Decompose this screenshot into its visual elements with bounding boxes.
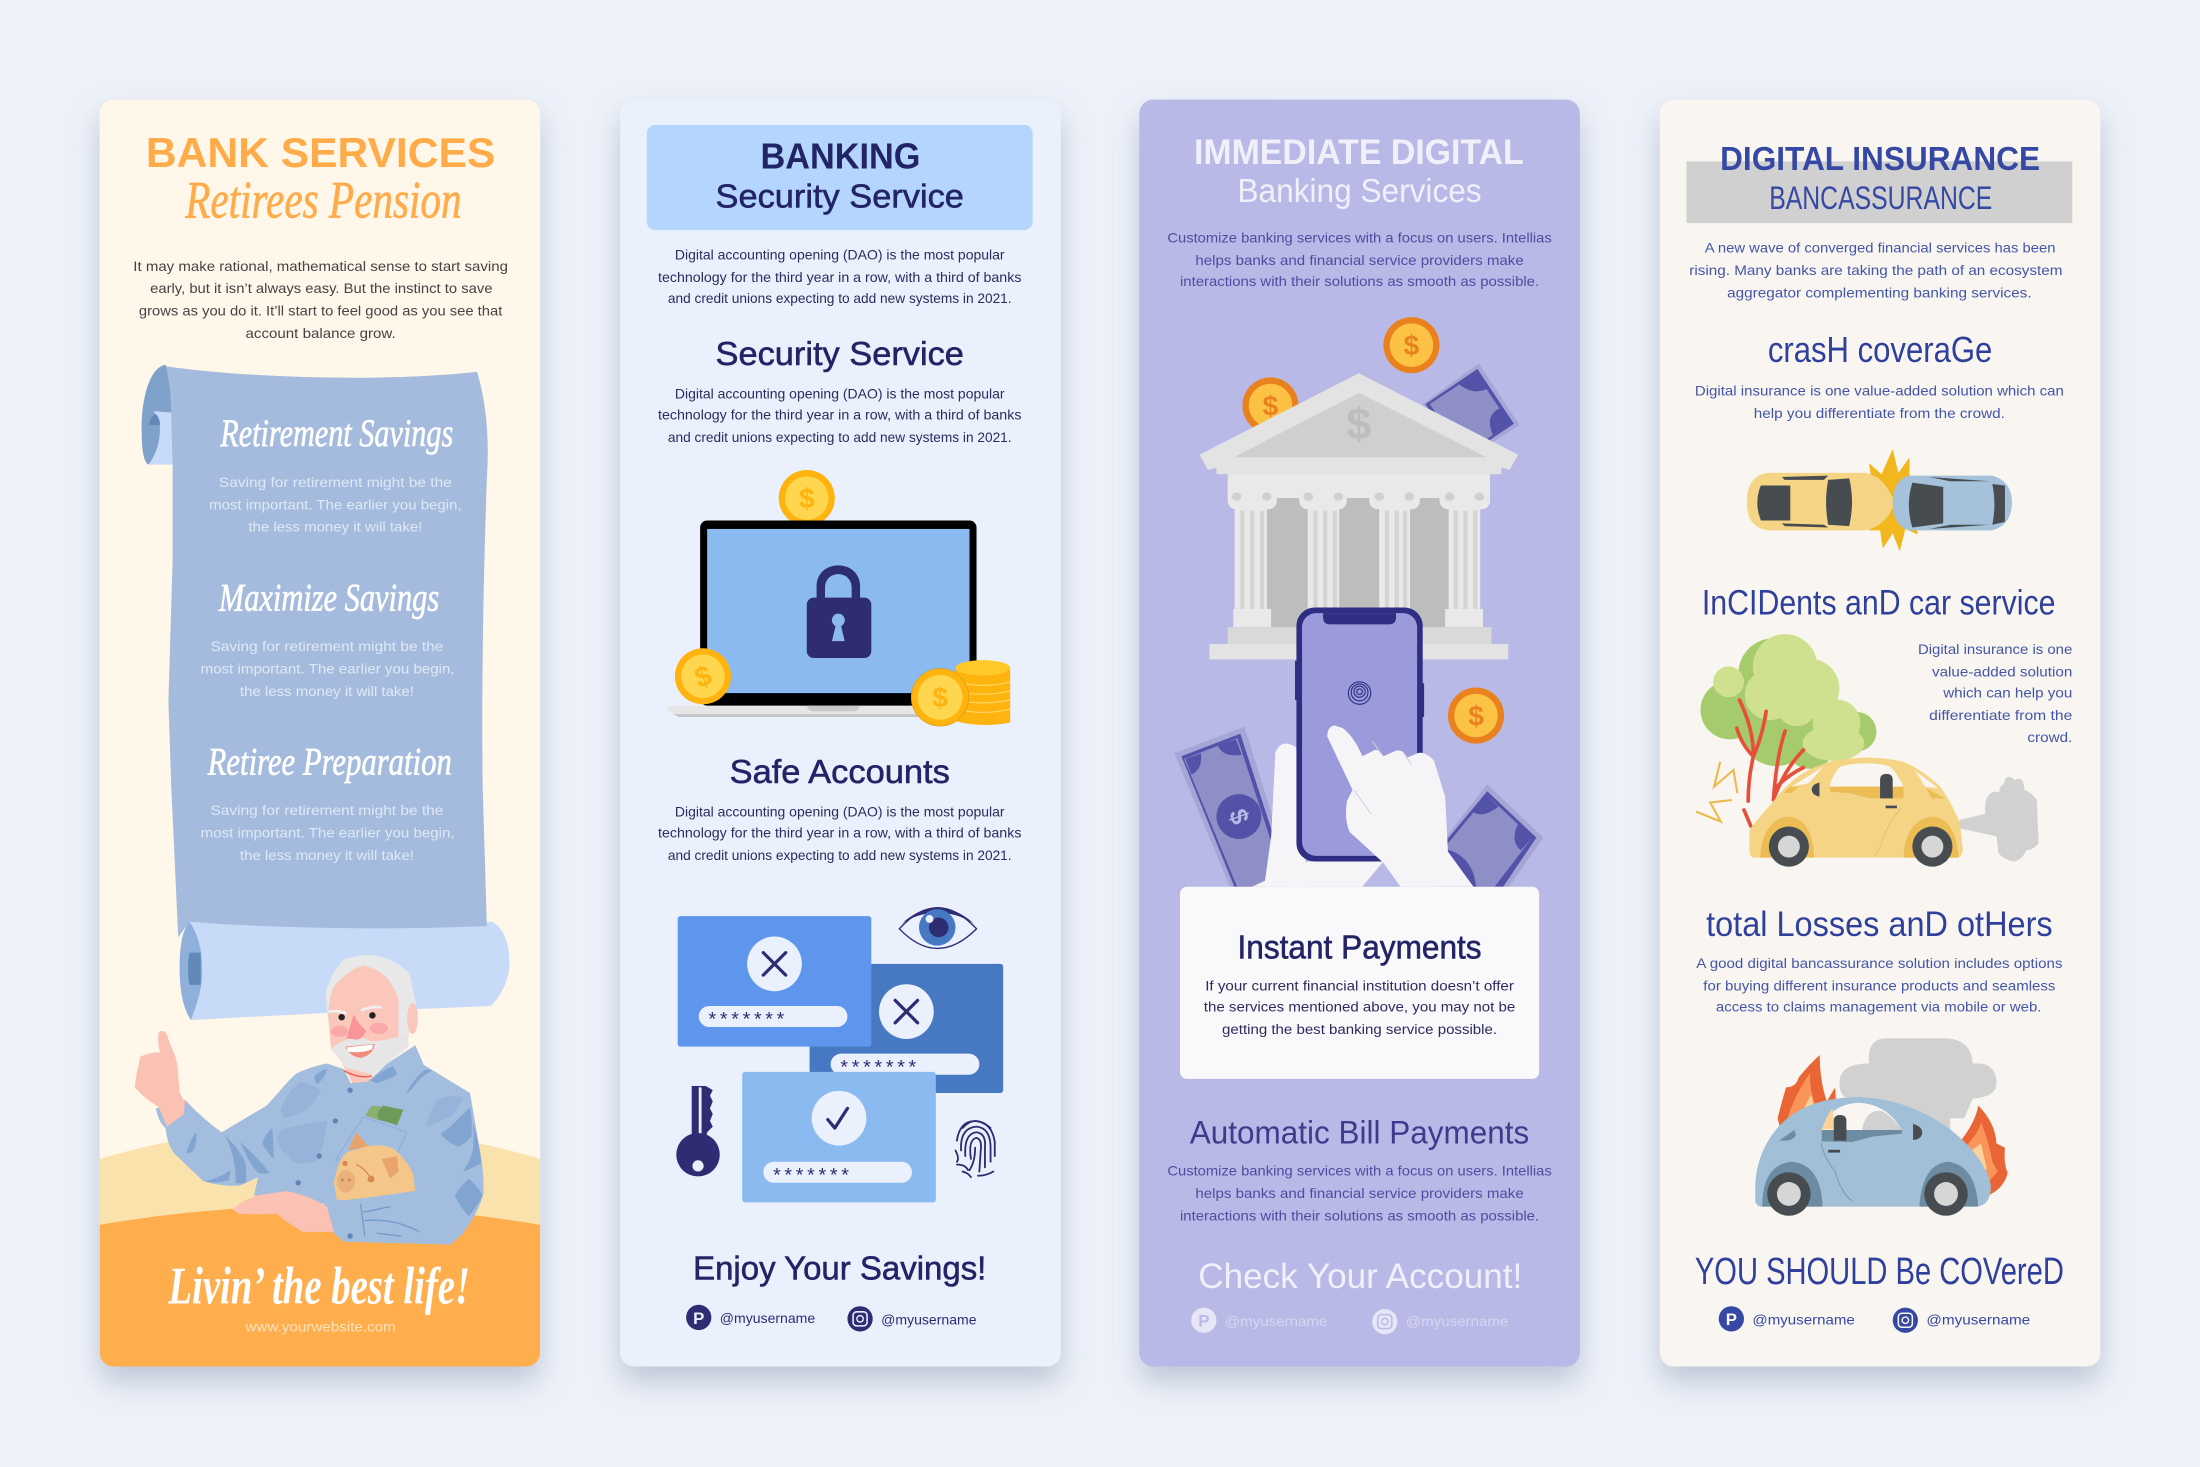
coins: $ <box>1263 390 1279 421</box>
flames <box>1778 1055 1838 1136</box>
header band <box>1686 161 2072 223</box>
social: pinterest: P <box>1198 1312 1209 1331</box>
title: BANK SERVICES <box>146 129 495 176</box>
paragraph: interactions with their solutions as smooth as possible. <box>1180 1208 1539 1224</box>
scroll <box>142 365 509 1020</box>
section: retiree preparation: Retiree Preparation <box>207 740 452 783</box>
resting hand <box>233 1191 334 1232</box>
title: DIGITAL INSURANCE <box>1720 141 2040 178</box>
icon: key <box>676 1086 720 1176</box>
panel: banking security service <box>620 100 1061 1367</box>
paragraph: access to claims management via mobile or web. <box>1716 999 2041 1015</box>
social: instagram <box>1893 1308 2030 1333</box>
banknote: bottom right <box>1444 784 1544 887</box>
card: failed login front <box>678 916 871 1047</box>
right aligned paragraph: differentiate from the <box>1929 707 2073 723</box>
section: retirement savings: Retirement Savings <box>220 412 453 455</box>
intro paragraph: early, but it isn’t always easy. But the instinct to save <box>150 280 493 296</box>
card: successful login <box>742 1072 936 1202</box>
section: retiree preparation <box>201 740 455 863</box>
paragraph: A good digital bancassurance solution includes options <box>1696 955 2062 971</box>
right aligned paragraph: crowd. <box>2027 729 2072 745</box>
shirt dark folds <box>187 1066 481 1183</box>
card background <box>100 100 540 1367</box>
paragraph: interactions with their solutions as smooth as possible. <box>1180 273 1539 289</box>
heading: safe accounts: Safe Accounts <box>730 754 950 791</box>
paragraph: and credit unions expecting to add new systems in 2021. <box>668 847 1012 863</box>
section: retirement savings: most important. The earlier you begin, <box>209 496 462 512</box>
subtitle: Security Service <box>716 179 964 216</box>
heading: crash coverage: crasH coveraGe <box>1768 329 1992 370</box>
shirt light patches <box>276 1082 463 1163</box>
closing heading: YOU SHOULD Be COVereD <box>1695 1251 2064 1293</box>
smoke <box>1959 777 2039 861</box>
tree <box>1700 638 1876 769</box>
paragraph <box>658 385 1021 445</box>
illustration: bank, phone and money <box>1174 317 1543 898</box>
shirt <box>156 1045 484 1244</box>
paragraph <box>658 804 1021 863</box>
heading: incidents and car service: InCIDents anD car service <box>1702 584 2055 623</box>
neck <box>342 1063 376 1084</box>
smoke <box>1839 1038 1997 1136</box>
banknote: top right <box>1423 364 1520 442</box>
card: failed login front: ******* <box>709 1009 785 1031</box>
coins: $ <box>1404 330 1420 361</box>
illustration: car on fire <box>1755 1038 2008 1216</box>
paragraph <box>1689 240 2062 300</box>
paragraph <box>1167 1163 1552 1224</box>
white callout panel: If your current financial institution doesn’t offer <box>1205 978 1514 994</box>
closing heading: Enjoy Your Savings! <box>693 1251 986 1288</box>
paragraph: Customize banking services with a focus on users. Intellias <box>1167 1163 1552 1179</box>
card: successful login: ******* <box>773 1164 849 1186</box>
paragraph: Digital accounting opening (DAO) is the most popular <box>675 247 1005 263</box>
paragraph: technology for the third year in a row, with a third of banks <box>658 269 1021 285</box>
card background <box>620 100 1061 1367</box>
section: maximize savings: Saving for retirement might be the <box>210 638 444 654</box>
intro paragraph: account balance grow. <box>246 325 396 341</box>
card: failed login back <box>810 964 1003 1093</box>
intro paragraph <box>133 258 508 341</box>
illustration: old man with piggy bank <box>135 955 484 1244</box>
paragraph <box>1695 383 2064 421</box>
white callout panel: Instant Payments <box>1237 929 1482 966</box>
paragraph: A new wave of converged financial services has been <box>1705 240 2055 256</box>
heading: total losses and others: total Losses anD otHers <box>1706 905 2053 944</box>
intro paragraph: It may make rational, mathematical sense to start saving <box>133 258 508 274</box>
paragraph: Digital accounting opening (DAO) is the most popular <box>675 804 1005 820</box>
intro paragraph: grows as you do it. It’ll start to feel good as you see that <box>139 303 502 319</box>
card background <box>1660 100 2100 1367</box>
section: retiree preparation: most important. The earlier you begin, <box>201 825 455 841</box>
white callout panel: the services mentioned above, you may not be <box>1204 999 1516 1015</box>
illustration: laptop with lock and coins: $ <box>799 483 815 514</box>
pocket <box>335 1117 407 1160</box>
social: pinterest <box>686 1305 815 1330</box>
coins: $ <box>1468 700 1484 731</box>
ground hills <box>100 1127 540 1367</box>
banknote: bottom left: $ <box>1223 805 1254 828</box>
card background <box>1139 100 1580 1367</box>
section: retirement savings: Saving for retirement might be the <box>219 474 452 490</box>
section: maximize savings: Maximize Savings <box>218 576 439 619</box>
panel: retirees pension <box>100 100 540 1367</box>
illustration: login cards <box>676 908 1003 1202</box>
header box <box>647 125 1033 230</box>
illustration: laptop with lock and coins <box>668 470 1010 726</box>
forearm and cuff <box>327 1179 483 1244</box>
paragraph: aggregator complementing banking services. <box>1727 284 2032 300</box>
social: pinterest <box>1719 1306 1855 1331</box>
social: pinterest: @myusername <box>1752 1311 1855 1327</box>
social: instagram: @myusername <box>1926 1311 2030 1327</box>
right aligned paragraph: which can help you <box>1942 684 2072 700</box>
paragraph: technology for the third year in a row, with a third of banks <box>658 825 1021 841</box>
paragraph <box>1696 955 2062 1015</box>
hand behind phone <box>1264 744 1306 887</box>
subtitle: Retirees Pension <box>184 169 462 229</box>
website: www.yourwebsite.com <box>244 1318 396 1334</box>
white callout panel: getting the best banking service possible. <box>1222 1021 1497 1037</box>
social: pinterest: @myusername <box>1225 1313 1327 1329</box>
white callout panel <box>1180 887 1539 1079</box>
illustration: laptop with lock and coins: $ <box>932 682 948 713</box>
paragraph: and credit unions expecting to add new systems in 2021. <box>668 290 1012 306</box>
paragraph: Digital insurance is one value-added solution which can <box>1695 383 2064 399</box>
illustration: car hit tree <box>1696 634 2039 867</box>
title: BANKING <box>760 135 920 176</box>
paragraph: helps banks and financial service providers make <box>1195 1185 1524 1201</box>
smartphone <box>1295 608 1424 861</box>
blue car <box>1755 1097 1991 1207</box>
footer slogan: Livin’ the best life! <box>168 1255 470 1315</box>
panel: immediate digital banking services <box>1139 100 1580 1367</box>
paragraph: Customize banking services with a focus on users. Intellias <box>1167 230 1552 246</box>
heading: security service: Security Service <box>716 336 964 373</box>
section: maximize savings: most important. The earlier you begin, <box>201 660 455 676</box>
social: pinterest <box>1191 1308 1327 1333</box>
padlock <box>817 565 860 603</box>
social: instagram: @myusername <box>1406 1313 1508 1329</box>
coins <box>1242 317 1504 744</box>
social: instagram: @myusername <box>881 1311 977 1327</box>
paragraph: Digital accounting opening (DAO) is the most popular <box>675 385 1005 401</box>
panel: digital insurance bancassurance <box>1660 100 2100 1367</box>
card: failed login back: ******* <box>840 1056 917 1078</box>
social: instagram <box>1372 1309 1508 1334</box>
social: pinterest: @myusername <box>720 1310 815 1326</box>
yellow car <box>1749 758 1963 858</box>
bank building: $ <box>1346 398 1371 449</box>
heading: automatic bill payments: Automatic Bill Payments <box>1190 1114 1529 1150</box>
bank building <box>1200 373 1518 659</box>
social: pinterest: P <box>1726 1310 1737 1329</box>
icon: fingerprint <box>955 1121 995 1177</box>
section: retirement savings: the less money it will take! <box>248 519 422 535</box>
section: retiree preparation: the less money it will take! <box>240 847 414 863</box>
social: pinterest: P <box>693 1309 704 1328</box>
right aligned paragraph: value-added solution <box>1932 663 2072 679</box>
hands <box>1249 861 1383 888</box>
thumbs up hand <box>159 1100 185 1127</box>
paragraph <box>1167 230 1552 289</box>
paragraph: technology for the third year in a row, with a third of banks <box>658 407 1021 423</box>
subtitle: Banking Services <box>1237 173 1482 210</box>
paragraph: rising. Many banks are taking the path of an ecosystem <box>1689 262 2062 278</box>
paragraph <box>658 247 1021 306</box>
icon: eye <box>899 908 977 948</box>
closing heading: Check Your Account! <box>1198 1257 1522 1296</box>
paragraph: help you differentiate from the crowd. <box>1754 405 2005 421</box>
illustration: laptop with lock and coins: $ <box>691 659 716 694</box>
social: instagram <box>847 1306 977 1331</box>
right aligned paragraph <box>1918 641 2073 745</box>
subtitle: BANCASSURANCE <box>1769 180 1992 216</box>
illustration: car crash top view <box>1747 449 2012 551</box>
section: retirement savings <box>209 412 462 535</box>
paragraph: helps banks and financial service providers make <box>1195 252 1524 268</box>
title: IMMEDIATE DIGITAL <box>1194 133 1524 172</box>
money in pocket <box>365 1106 386 1121</box>
banknote: bottom left <box>1174 727 1272 887</box>
section: maximize savings <box>201 576 455 699</box>
paragraph: for buying different insurance products and seamless <box>1703 978 2055 994</box>
paragraph: and credit unions expecting to add new systems in 2021. <box>668 429 1012 445</box>
section: retiree preparation: Saving for retirement might be the <box>210 802 444 818</box>
section: maximize savings: the less money it will take! <box>240 683 414 699</box>
head <box>326 955 416 1075</box>
piggy bank <box>334 1145 415 1202</box>
right aligned paragraph: Digital insurance is one <box>1918 641 2073 657</box>
